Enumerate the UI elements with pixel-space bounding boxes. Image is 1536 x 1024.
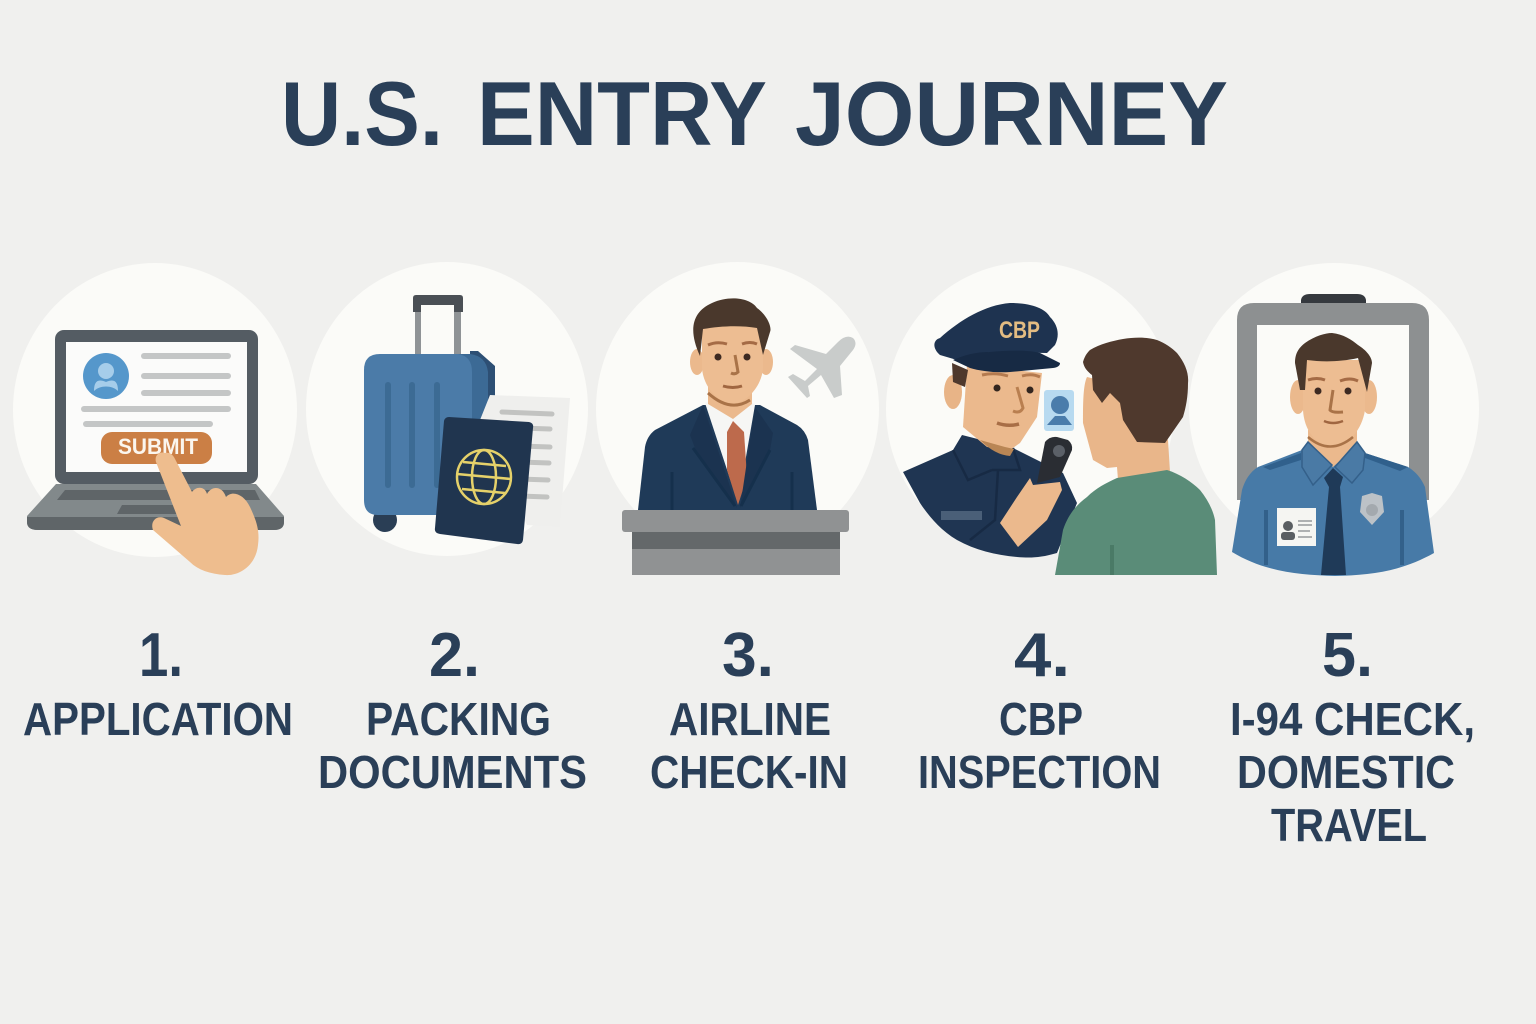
step label 2 line 2: DOCUMENTS — [318, 746, 587, 798]
step number 1: 1. — [139, 621, 183, 690]
step number 3: 3. — [722, 621, 774, 690]
step number 4: 4. — [1014, 621, 1070, 690]
step label 2: PACKING — [366, 693, 551, 745]
title: JOURNEY — [795, 64, 1228, 165]
step number 2: 2. — [429, 621, 480, 690]
title: ENTRY — [477, 64, 767, 165]
step label 3 line 2: CHECK-IN — [650, 746, 848, 798]
step number 5: 5. — [1322, 621, 1373, 690]
step label 5 line 2: DOMESTIC — [1237, 746, 1455, 798]
icon: officer in scanner frame — [1189, 263, 1479, 576]
icon: CBP officer scanning traveler — [886, 262, 1217, 575]
step label 3: AIRLINE — [669, 693, 831, 745]
step label 4 line 2: INSPECTION — [918, 746, 1161, 798]
icon: suitcase with passport and document — [306, 262, 588, 556]
step label 5 line 3: TRAVEL — [1271, 799, 1427, 851]
step label 5: I-94 CHECK, — [1230, 693, 1475, 745]
icon: agent at counter with plane — [596, 262, 879, 575]
icon: laptop with submit form — [13, 263, 297, 575]
panel: step 4 CBP inspection — [886, 262, 1217, 798]
title: U.S. — [281, 64, 443, 165]
panel: step 3 airline check-in — [596, 262, 879, 798]
panel: step 5 I-94 check, domestic travel — [1189, 263, 1479, 851]
icon: laptop with submit form: SUBMIT — [118, 434, 199, 459]
step label 1: APPLICATION — [23, 693, 293, 745]
step label 4: CBP — [999, 693, 1083, 745]
panel: step 1 application — [13, 263, 297, 745]
panel: step 2 packing documents — [306, 262, 588, 798]
title — [281, 64, 1228, 165]
icon: CBP officer scanning traveler: CBP — [999, 317, 1040, 344]
